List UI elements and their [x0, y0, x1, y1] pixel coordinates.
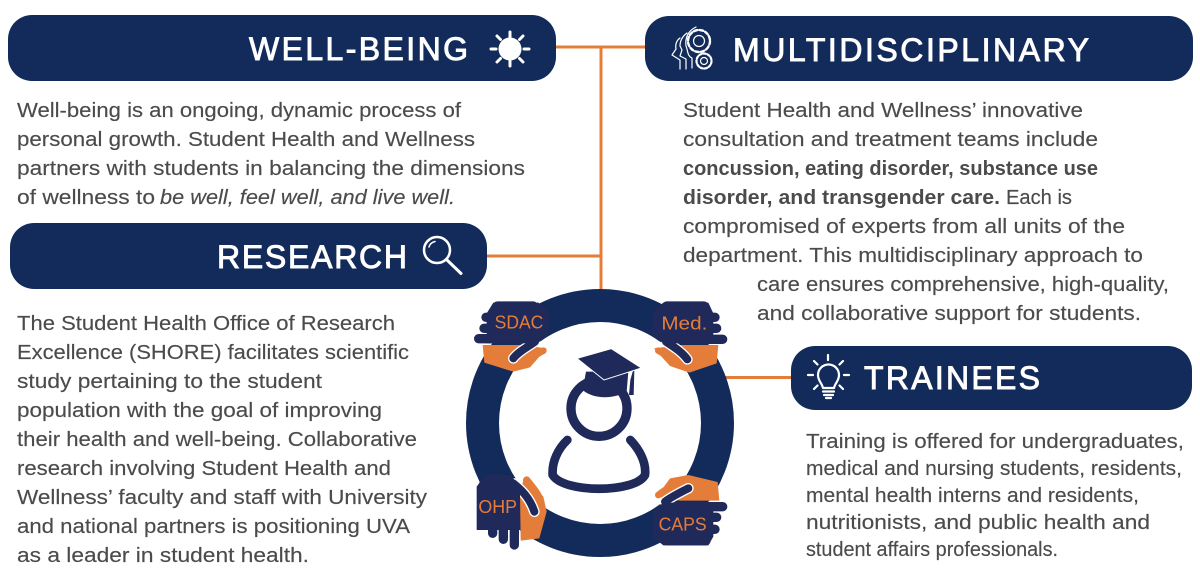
text: multidisciplinary description: consultation and treatment teams include [683, 128, 1098, 151]
text: trainees description: student affairs professionals. [806, 538, 1058, 561]
text: research description: The Student Health Office of Research [17, 312, 395, 335]
text: well-being description: Well-being is an ongoing, dynamic process of [17, 99, 461, 122]
text: multidisciplinary description: department. This multidisciplinary approach to [683, 244, 1143, 267]
text: well-being description: partners with students in balancing the dimensions [17, 157, 525, 180]
text: multidisciplinary description: disorder, and transgender care. [683, 186, 1000, 209]
text: multidisciplinary description: concussion, eating disorder, substance use [683, 157, 1098, 180]
text: trainees description: Training is offered for undergraduates, [806, 430, 1184, 453]
hand: OHP [477, 475, 547, 545]
icon: heads with gears [672, 27, 712, 69]
icon: light bulb [808, 355, 849, 398]
panel: trainees header [791, 346, 1192, 410]
icon: graduate student [553, 349, 645, 489]
text: research description: as a leader in student health. [17, 544, 309, 567]
text: multidisciplinary description: Each is [1006, 186, 1072, 209]
text: research description: and national partners is positioning UVA [17, 515, 410, 538]
text: multidisciplinary description: compromised of experts from all units of the [683, 215, 1125, 238]
hand: SDAC [479, 303, 549, 372]
text: trainees description: mental health interns and residents, [806, 484, 1139, 507]
text: well-being description: of wellness to [17, 186, 155, 209]
text: multidisciplinary description: care ensures comprehensive, high-quality, [757, 273, 1169, 296]
text: research description: their health and well-being. Collaborative [17, 428, 417, 451]
text: research description: research involving Student Health and [17, 457, 391, 480]
panel: multidisciplinary header [645, 16, 1193, 81]
text: research description: study pertaining to the student [17, 370, 322, 393]
text: well-being description: be well, feel well, and live well. [160, 186, 455, 209]
text: research description: population with the goal of improving [17, 399, 382, 422]
text: multidisciplinary description [683, 99, 1169, 325]
panel: research header [10, 223, 487, 289]
text: trainees description [806, 430, 1184, 561]
text: trainees description: nutritionists, and public health and [806, 511, 1150, 534]
label: Med. [661, 313, 707, 334]
connector lines [487, 47, 791, 378]
panel: multidisciplinary header: MULTIDISCIPLINARY [733, 32, 1089, 68]
text: well-being description [17, 99, 525, 209]
text: research description: Excellence (SHORE) facilitates scientific [17, 341, 409, 364]
panel: well-being header [8, 15, 556, 81]
icon: magnifying glass [424, 237, 461, 274]
hand: CAPS [653, 475, 723, 545]
label: OHP [478, 496, 517, 517]
text: well-being description: personal growth. Student Health and Wellness [17, 128, 475, 151]
label: CAPS [659, 513, 707, 534]
panel: trainees header: TRAINEES [864, 360, 1040, 396]
panel: research header: RESEARCH [217, 239, 407, 275]
hand: Med. [652, 303, 723, 373]
ring [482, 306, 718, 540]
text: multidisciplinary description: and collaborative support for students. [757, 302, 1141, 325]
diagram: care ring with hands [477, 303, 723, 545]
icon: sun [491, 32, 529, 66]
panel: well-being header: WELL-BEING [249, 31, 468, 67]
text: research description: Wellness’ faculty and staff with University [17, 486, 428, 509]
label: SDAC [495, 311, 543, 332]
text: multidisciplinary description: Student Health and Wellness’ innovative [683, 99, 1083, 122]
text: research description [17, 312, 428, 567]
text: trainees description: medical and nursing students, residents, [806, 457, 1182, 480]
